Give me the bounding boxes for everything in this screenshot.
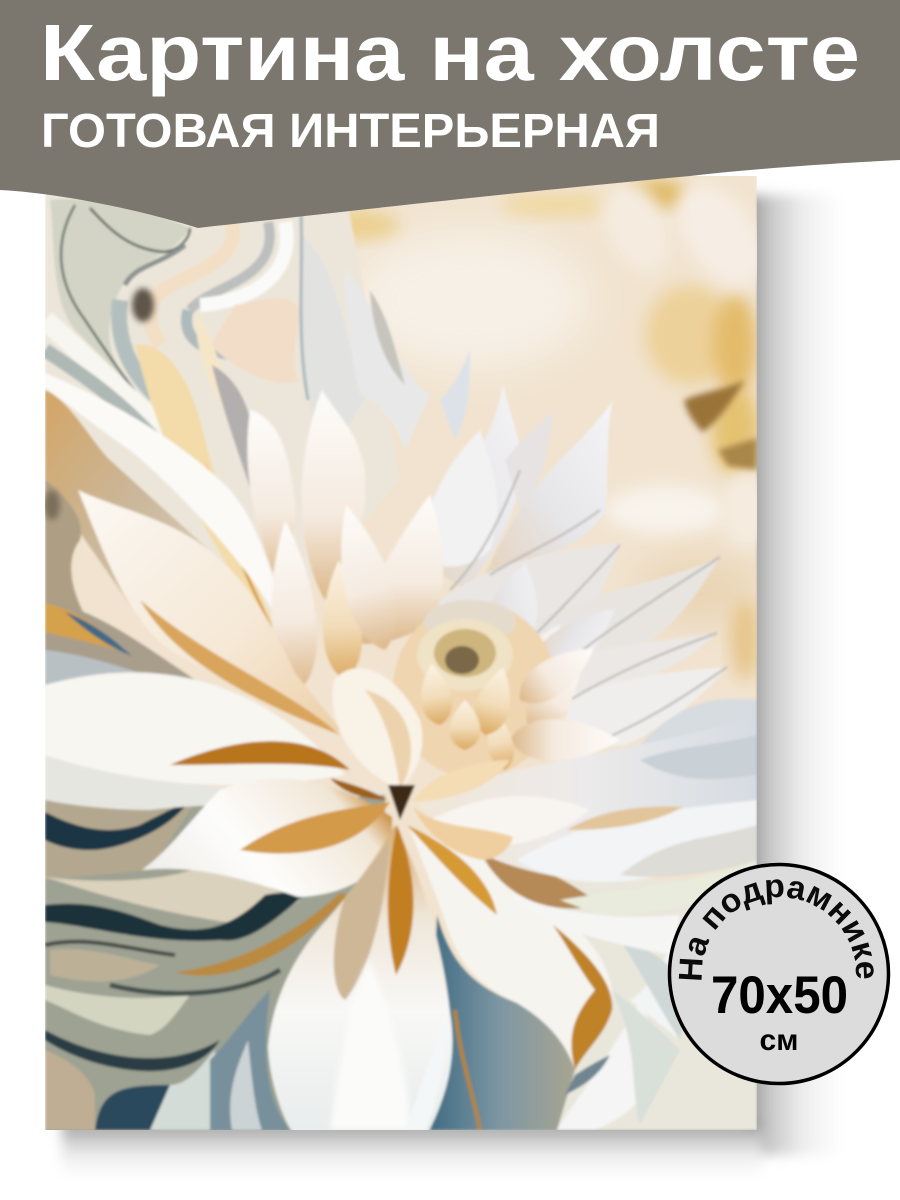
painting background	[70, 176, 757, 1000]
lower right marble and petals	[427, 880, 757, 1130]
marble swirls, lower left	[45, 795, 385, 1135]
front centre petals	[330, 668, 510, 820]
badge size value: 70x50	[711, 966, 848, 1025]
title: Картина на холсте	[40, 8, 860, 97]
large left petals	[45, 490, 392, 897]
flower centre dome	[393, 600, 620, 778]
subtitle: ГОТОВАЯ ИНТЕРЬЕРНАЯ	[41, 105, 660, 158]
badge unit: см	[760, 1024, 798, 1057]
large right petals	[414, 736, 757, 882]
header banner	[0, 0, 900, 228]
marble swirls, upper left	[45, 190, 430, 662]
outer petals of upper dahlia	[263, 350, 757, 750]
canvas drop shadow	[62, 195, 842, 1178]
badge arc text: На подрамнике	[678, 879, 874, 980]
marble swirls, left edge	[44, 373, 290, 690]
painting: white and gold flower on canvas	[44, 167, 781, 1135]
large bottom petals	[268, 825, 757, 1135]
badge: canvas size	[668, 862, 890, 1086]
